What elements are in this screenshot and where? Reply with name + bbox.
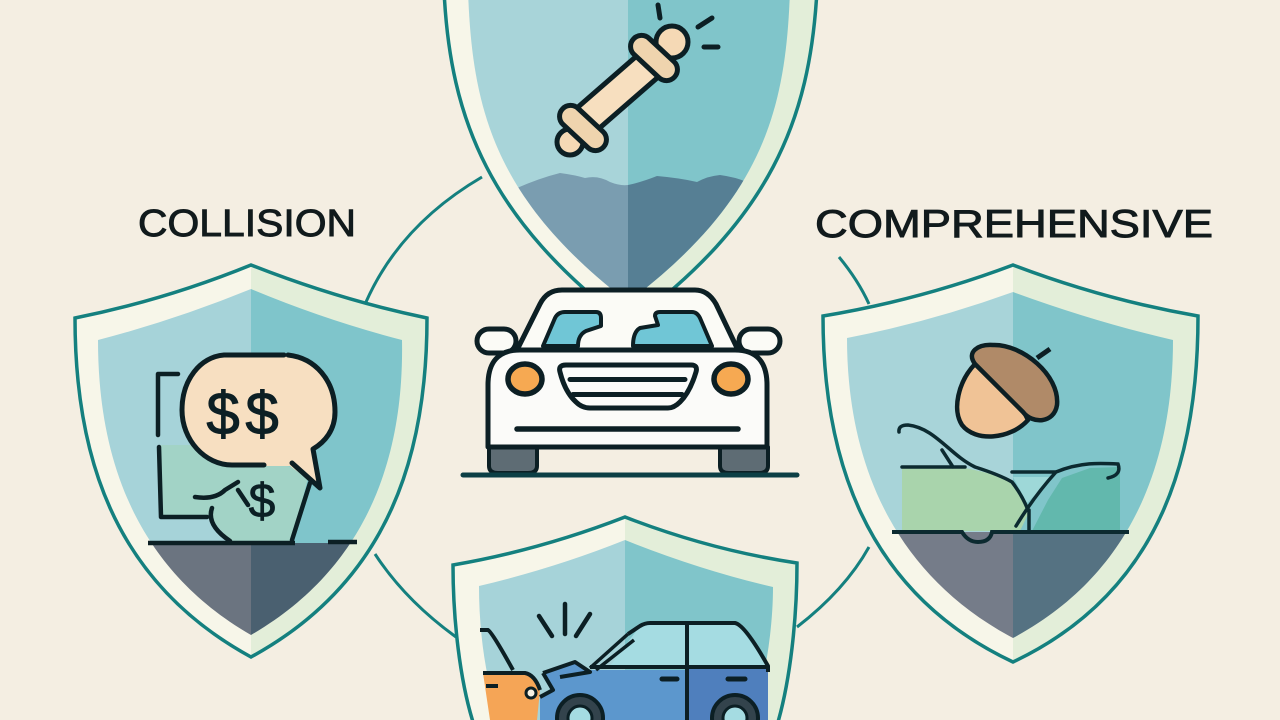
label: comprehensive: COMPREHENSIVE (815, 203, 1213, 246)
ground line (463, 472, 797, 478)
headlights (508, 364, 748, 394)
bottom shield: collision crash (453, 517, 797, 720)
connecting ring arcs (366, 177, 869, 637)
icon: acorn (957, 345, 1057, 436)
icon: small dollar and hand: $ (249, 475, 275, 528)
left shield: collision (75, 265, 427, 657)
icon: speech bubble (182, 355, 335, 488)
bumper line (517, 426, 738, 432)
icon: green document (160, 445, 310, 541)
mirrors (477, 329, 780, 353)
icon: blue car (540, 623, 768, 720)
icon: speech bubble: $ (245, 380, 279, 447)
icon: speech bubble: $ (206, 380, 240, 447)
icon: impact lines (539, 604, 590, 636)
cabin (517, 290, 738, 350)
icon: bracket (158, 374, 207, 517)
wheels (489, 447, 768, 473)
icon: small dollar and hand (195, 475, 310, 541)
icon: damaged car (892, 425, 1129, 542)
label: collision: COLLISION (138, 203, 356, 245)
icon: hammer handle (555, 5, 718, 155)
windows (543, 312, 712, 346)
right shield: comprehensive (823, 265, 1198, 662)
body (488, 350, 767, 447)
icon: orange car (480, 630, 540, 720)
top shield (442, 0, 818, 288)
grille (560, 365, 696, 408)
central car (463, 290, 797, 475)
ground line (148, 542, 357, 543)
water band (518, 173, 744, 288)
